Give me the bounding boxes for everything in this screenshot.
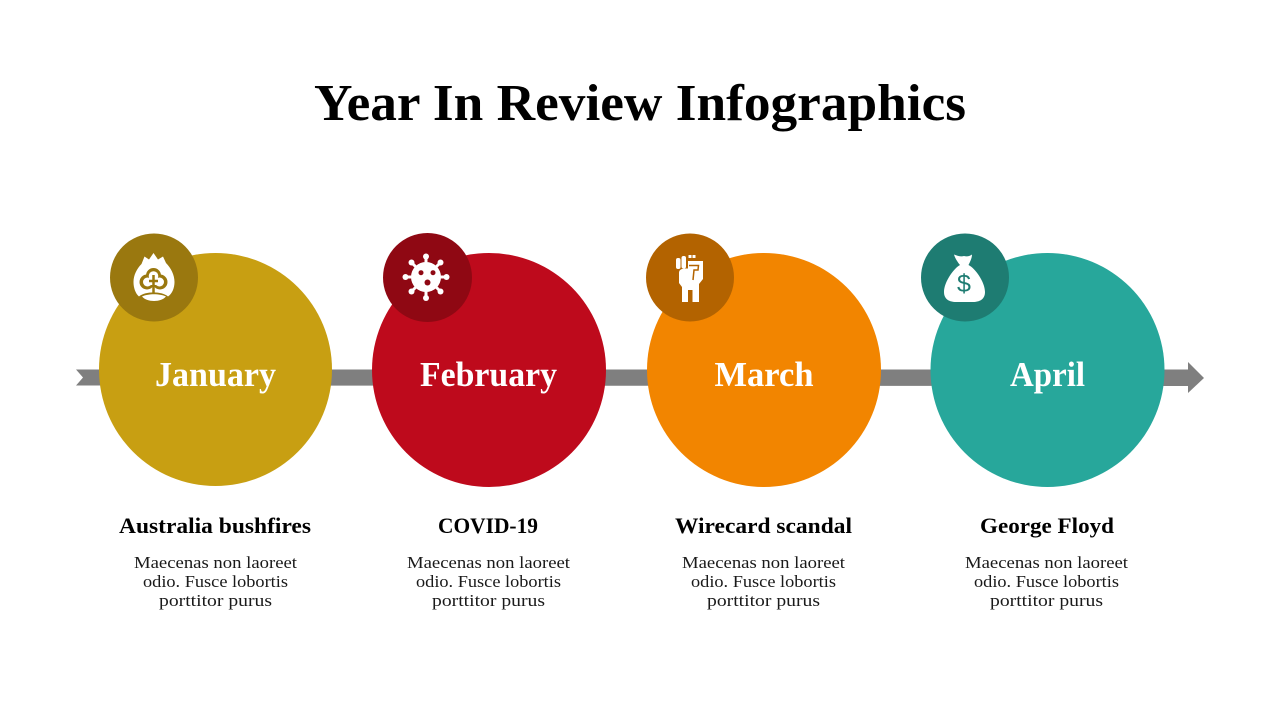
panel: April bbox=[921, 234, 1164, 487]
text block: April description bbox=[965, 553, 1128, 610]
icon: virus bbox=[383, 233, 472, 322]
timeline arrow bbox=[76, 362, 1204, 393]
March label: March bbox=[714, 355, 814, 394]
text block: January description: Maecenas non laoreet bbox=[134, 553, 297, 572]
text block: April description: porttitor purus bbox=[990, 591, 1103, 610]
heading: Wirecard scandal: Wirecard scandal bbox=[675, 513, 852, 538]
text block: February description bbox=[407, 553, 570, 610]
icon: money bag bbox=[921, 234, 1009, 322]
March circle bbox=[647, 253, 881, 487]
January circle bbox=[99, 253, 332, 486]
text block: February description: Maecenas non laoreet bbox=[407, 553, 570, 572]
panel: January bbox=[99, 234, 332, 486]
January label: January bbox=[155, 355, 276, 394]
February label: February bbox=[420, 355, 557, 394]
text block: February description: odio. Fusce lobortis bbox=[416, 572, 561, 591]
text block: January description bbox=[134, 553, 297, 610]
heading: George Floyd: George Floyd bbox=[980, 513, 1114, 538]
text block: March description: odio. Fusce lobortis bbox=[691, 572, 836, 591]
text block: March description: porttitor purus bbox=[707, 591, 820, 610]
icon: raised fist bbox=[646, 234, 734, 322]
text block: April description: odio. Fusce lobortis bbox=[974, 572, 1119, 591]
April circle bbox=[930, 253, 1164, 487]
title: Year In Review Infographics bbox=[314, 75, 966, 132]
February circle bbox=[372, 253, 606, 487]
icon: money bag: $ bbox=[957, 270, 971, 298]
text block: April description: Maecenas non laoreet bbox=[965, 553, 1128, 572]
text block: March description bbox=[682, 553, 845, 610]
icon: bushfire tree bbox=[110, 234, 198, 322]
text block: February description: porttitor purus bbox=[432, 591, 545, 610]
heading: Australia bushfires: Australia bushfires bbox=[119, 513, 311, 538]
April label: April bbox=[1010, 355, 1085, 394]
text block: January description: odio. Fusce lobortis bbox=[143, 572, 288, 591]
text block: March description: Maecenas non laoreet bbox=[682, 553, 845, 572]
panel: February bbox=[372, 233, 606, 487]
text block: January description: porttitor purus bbox=[159, 591, 272, 610]
heading: COVID-19: COVID-19 bbox=[438, 513, 538, 538]
panel: March bbox=[646, 234, 881, 487]
